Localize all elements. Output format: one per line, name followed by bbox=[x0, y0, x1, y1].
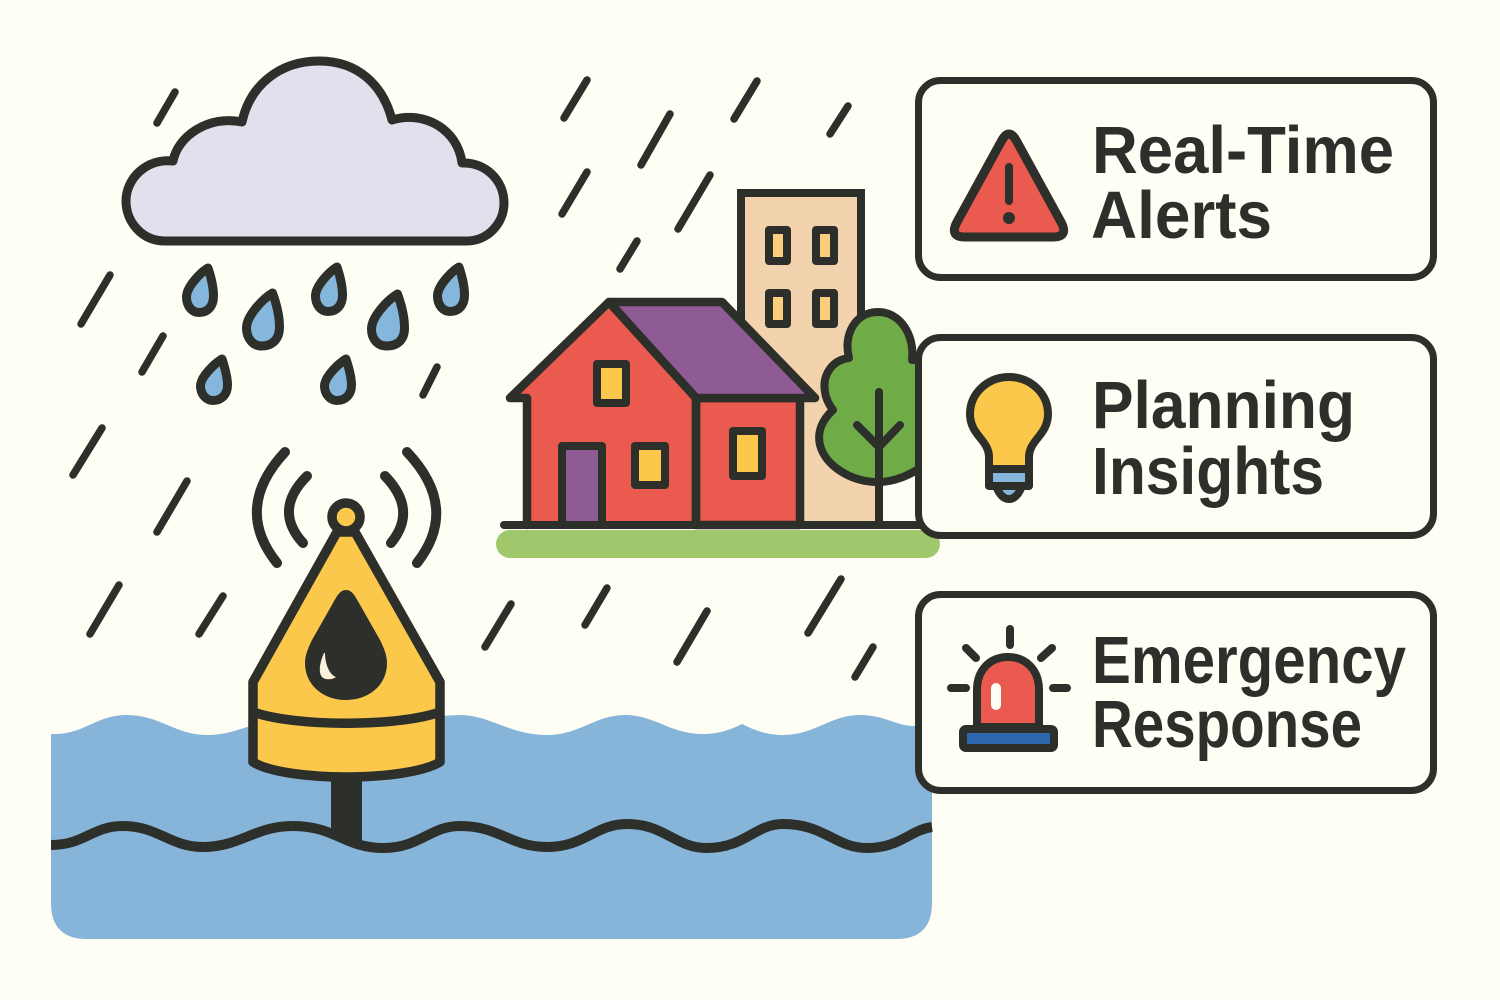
heading: real-time alerts: Alerts bbox=[1091, 178, 1272, 253]
ground bbox=[496, 525, 940, 558]
heading: planning insights bbox=[1092, 368, 1355, 509]
flood sensor buoy bbox=[253, 503, 440, 846]
heading: emergency response: Emergency bbox=[1092, 623, 1406, 698]
raindrops under cloud bbox=[186, 267, 464, 400]
signal waves bbox=[257, 452, 436, 563]
cloud bbox=[126, 61, 504, 241]
water line bbox=[51, 824, 932, 848]
panel: real-time alerts bbox=[918, 80, 1434, 278]
house bbox=[510, 302, 815, 525]
icon: siren bbox=[951, 629, 1067, 748]
tree bbox=[819, 312, 925, 525]
heading: real-time alerts bbox=[1091, 113, 1394, 253]
panel: emergency response bbox=[918, 594, 1434, 790]
icon: light bulb bbox=[970, 377, 1048, 499]
rain streaks bbox=[73, 80, 873, 677]
icon: warning triangle bbox=[954, 134, 1064, 237]
heading: real-time alerts: Real-Time bbox=[1092, 113, 1394, 188]
heading: planning insights: Insights bbox=[1092, 434, 1324, 509]
heading: planning insights: Planning bbox=[1092, 368, 1355, 443]
heading: emergency response: Response bbox=[1092, 687, 1362, 762]
water bbox=[51, 715, 932, 939]
panel: planning insights bbox=[918, 338, 1434, 536]
apartment building bbox=[741, 193, 875, 524]
heading: emergency response bbox=[1092, 623, 1406, 762]
